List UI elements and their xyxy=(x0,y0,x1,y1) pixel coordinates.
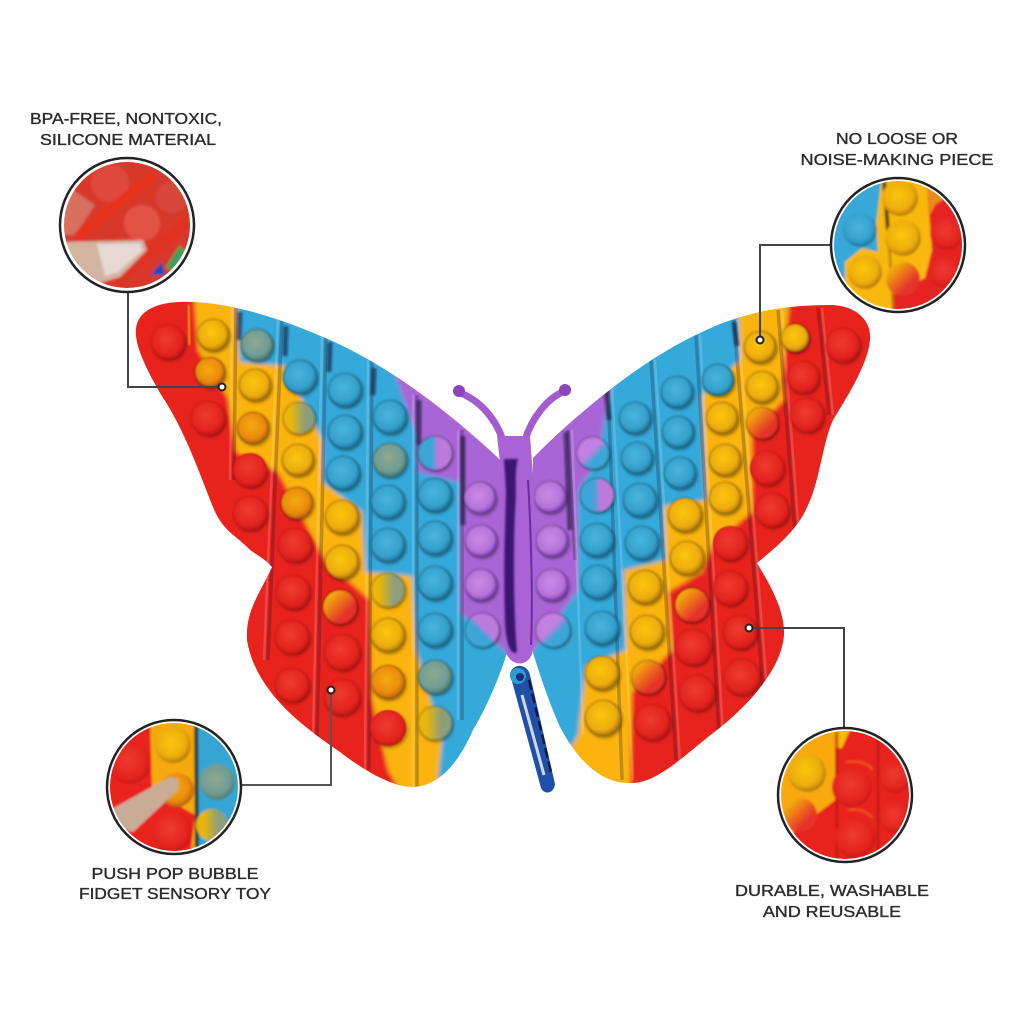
butterfly fidget toy xyxy=(120,290,880,800)
right wing bubbles xyxy=(534,324,860,740)
callout: BPA-free silicone material xyxy=(30,111,226,390)
marker dot xyxy=(746,624,752,632)
inset photo: pressing silicone xyxy=(60,158,195,295)
left wing bubbles xyxy=(151,319,499,746)
left wing xyxy=(136,302,506,787)
heading: BPA-free: SILICONE MATERIAL xyxy=(40,132,216,149)
leader line xyxy=(241,690,331,785)
inset photo: bubble rows xyxy=(830,175,970,320)
marker dot xyxy=(328,686,334,694)
heading: BPA-free: BPA-FREE, NONTOXIC, xyxy=(30,111,222,128)
leader line xyxy=(760,245,830,339)
right wing xyxy=(533,305,870,784)
marker dot xyxy=(218,384,226,390)
left wing colour bands xyxy=(136,302,506,787)
right wing ridges xyxy=(566,308,833,780)
heading: BPA-free xyxy=(30,111,222,149)
right wing colour bands xyxy=(533,305,870,784)
infographic canvas xyxy=(31,112,993,918)
heading: durable xyxy=(735,883,929,921)
left wing ridges xyxy=(188,305,463,790)
callout: push pop bubble fidget toy xyxy=(79,686,334,903)
heading: push pop: FIDGET SENSORY TOY xyxy=(79,886,271,903)
inset photo: red and yellow bubbles xyxy=(778,728,918,868)
leader line xyxy=(749,628,844,728)
antennae and head xyxy=(453,384,571,440)
marker dot xyxy=(756,336,764,344)
callout: no loose or noise-making piece xyxy=(756,131,994,344)
callout: durable, washable, reusable xyxy=(735,624,929,921)
heading: durable: DURABLE, WASHABLE xyxy=(735,883,929,900)
heading: no loose: NO LOOSE OR xyxy=(836,131,958,148)
heading: no loose xyxy=(800,131,994,169)
heading: push pop: PUSH POP BUBBLE xyxy=(92,866,258,883)
leader line xyxy=(128,292,221,387)
carabiner clip xyxy=(510,666,555,793)
inset photo: finger pressing bubble xyxy=(105,718,245,858)
heading: push pop xyxy=(79,866,271,903)
heading: durable: AND REUSABLE xyxy=(763,904,901,921)
heading: no loose: NOISE-MAKING PIECE xyxy=(800,152,994,169)
butterfly body xyxy=(497,436,535,664)
